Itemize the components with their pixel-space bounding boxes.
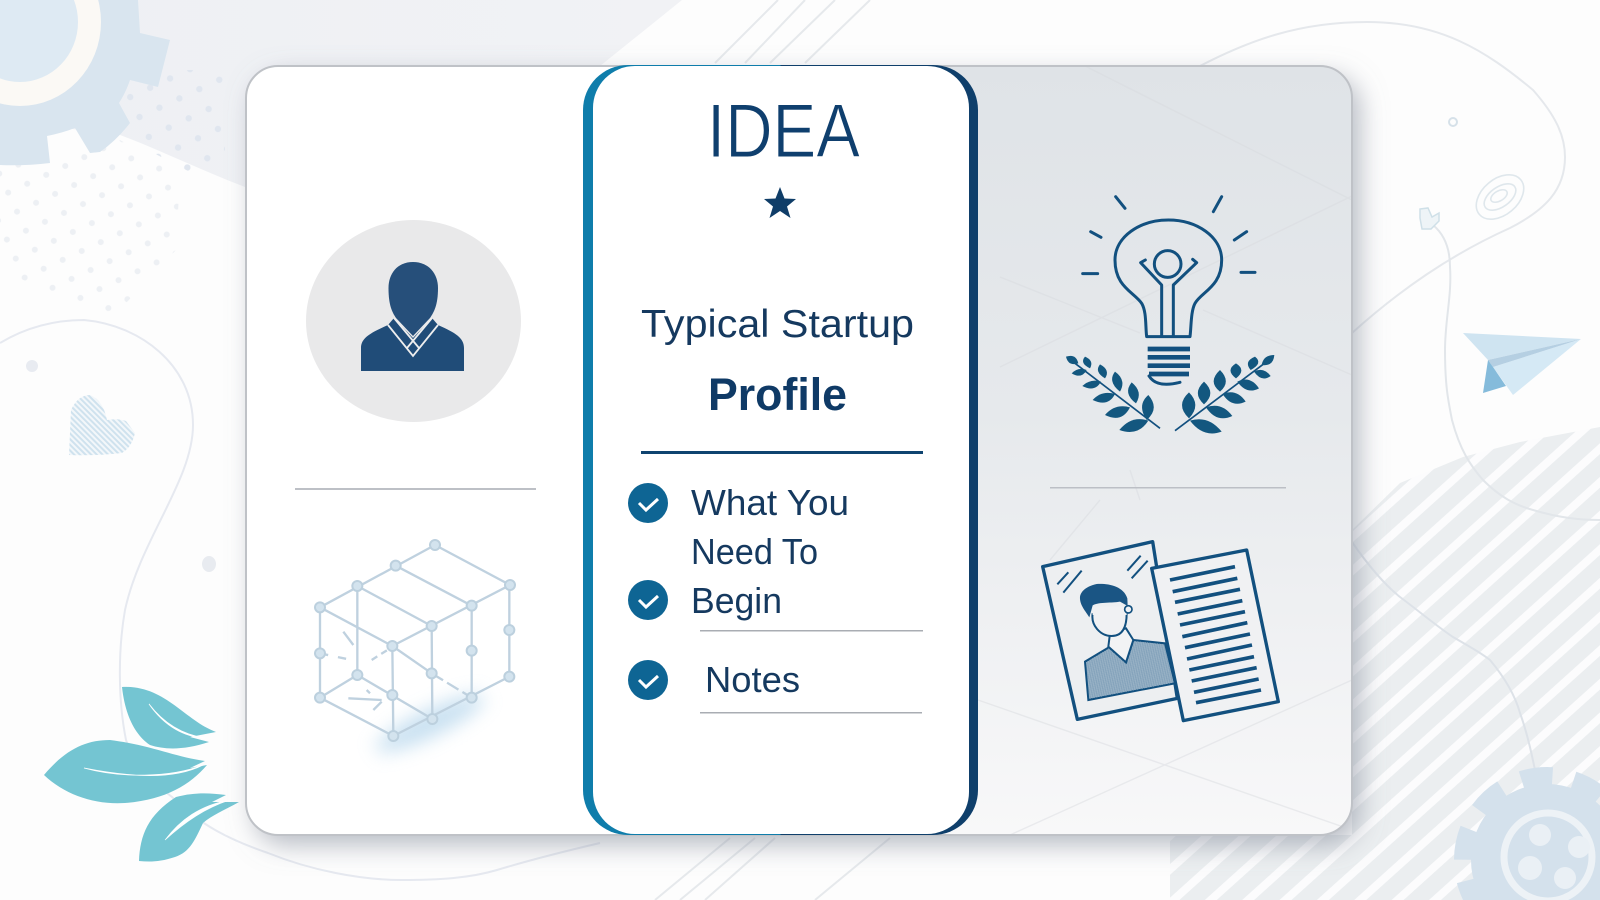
left blob outline xyxy=(0,320,600,880)
text sheet xyxy=(1152,550,1278,721)
title: IDEA xyxy=(707,89,860,174)
photo sheet xyxy=(1043,542,1177,719)
icon: resume documents xyxy=(1043,542,1278,721)
striped area bottom right xyxy=(1170,427,1600,900)
icon: swirl xyxy=(1468,166,1532,228)
check item 3 xyxy=(628,659,800,700)
icon: gear bottom right xyxy=(1464,777,1600,900)
icon: small flower xyxy=(1420,208,1439,229)
item rule 2 xyxy=(700,712,922,714)
icon: gear top left xyxy=(0,0,170,165)
check item 1 xyxy=(628,482,849,572)
subtitle: Typical Startup xyxy=(641,303,914,346)
small ring xyxy=(1449,118,1457,126)
dot left lower xyxy=(202,556,216,572)
leaf middle xyxy=(44,740,207,803)
divider right xyxy=(1050,487,1286,488)
halftone dots on band xyxy=(119,70,225,172)
check item 3: Notes xyxy=(705,659,800,700)
check item 2: Begin xyxy=(691,580,782,621)
halftone dots lower left xyxy=(0,140,180,320)
icon: hatched heart xyxy=(69,395,135,455)
item rule 1 xyxy=(700,630,923,632)
icon: light bulb with laurels xyxy=(1066,197,1274,433)
stem curve right xyxy=(1433,225,1600,520)
lower right curve xyxy=(1352,542,1537,780)
icon: wireframe cube xyxy=(315,540,515,762)
heading rule xyxy=(641,451,923,454)
check item 2 xyxy=(628,580,782,621)
dot left upper xyxy=(26,360,38,372)
check item 1: What You xyxy=(691,482,849,523)
right top blob outline xyxy=(1200,22,1565,333)
subtitle bold: Profile xyxy=(708,369,847,420)
panel: right tinted side xyxy=(930,66,1352,835)
icon: star xyxy=(764,187,796,218)
divider left xyxy=(295,488,536,490)
panel: center column xyxy=(583,65,978,835)
icon: teal leaves xyxy=(44,687,239,862)
leaf bottom xyxy=(139,793,239,862)
top diagonal lines xyxy=(715,0,870,63)
bottom diagonal lines xyxy=(655,838,890,900)
leaf top xyxy=(122,687,216,748)
top band shape xyxy=(0,0,682,187)
icon: paper plane xyxy=(1463,333,1581,395)
panel: main card xyxy=(246,66,1352,835)
icon: person avatar xyxy=(306,220,521,422)
check item 1: Need To xyxy=(691,531,818,572)
